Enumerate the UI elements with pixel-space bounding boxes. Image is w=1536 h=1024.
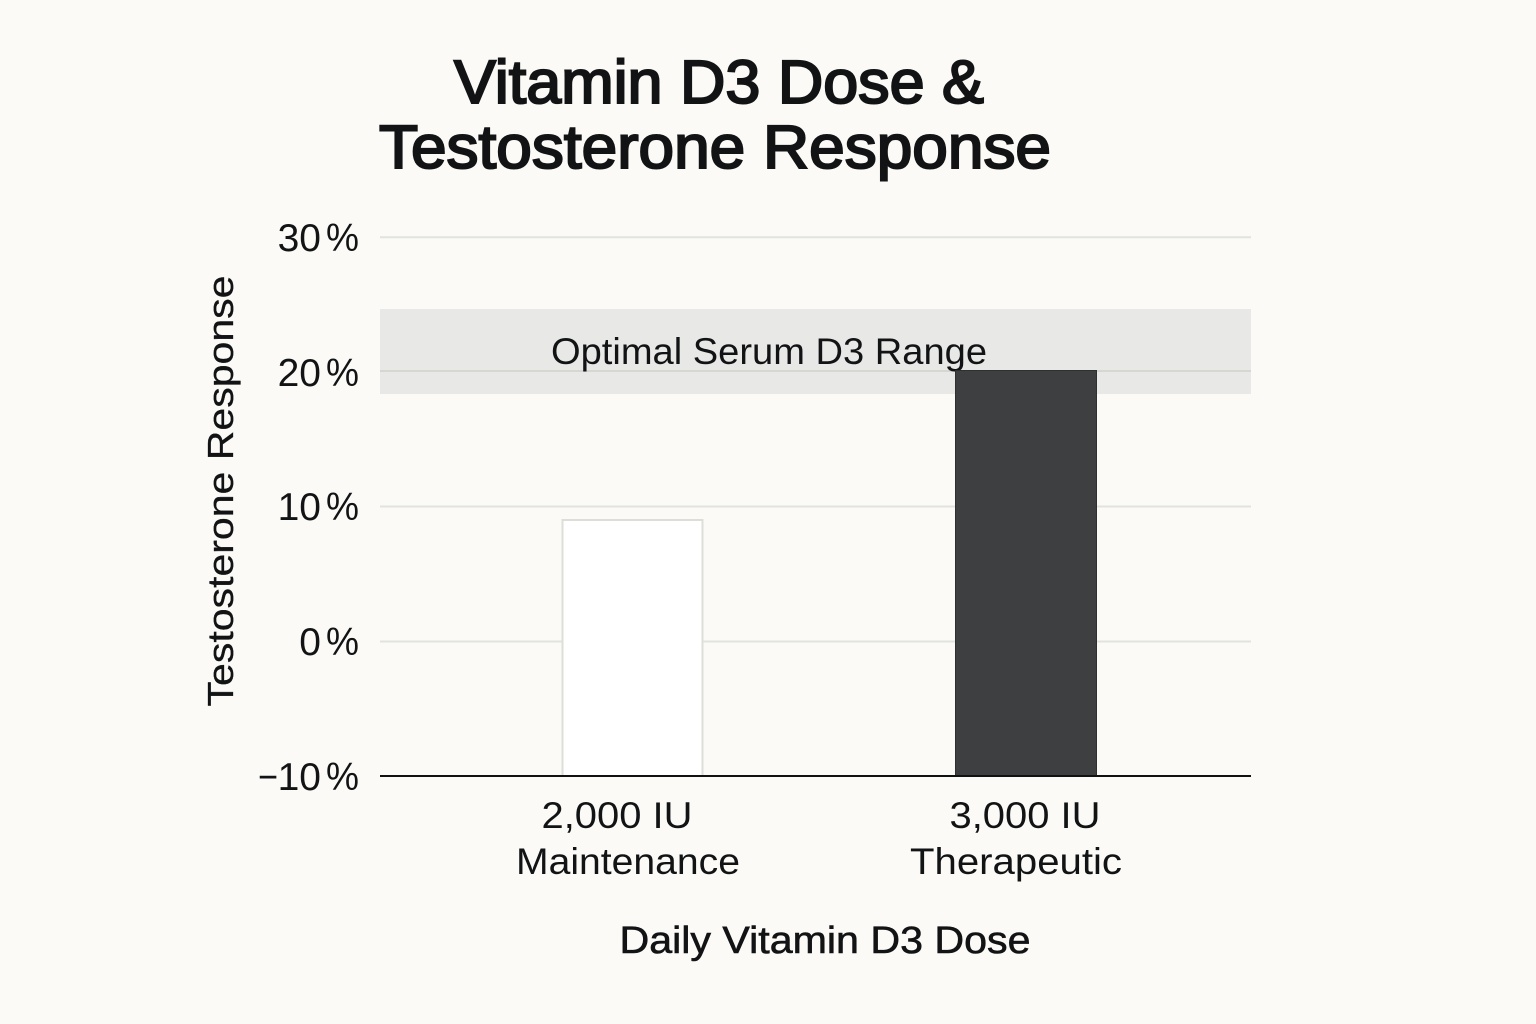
y axis tick labels: 30 [278,217,321,260]
y axis tick labels: 0 [299,621,321,664]
category label: 2,000 IU [516,795,740,882]
category label: 3,000 IU: 3,000 IU [950,795,1100,836]
y axis tick labels: − [258,756,278,799]
x axis line [380,775,1251,777]
band: optimal serum D3 range [380,309,1251,394]
y axis tick labels: 10 [278,756,321,799]
category label: 2,000 IU: Maintenance [516,841,740,882]
bar: 2,000 IU maintenance [562,520,702,776]
y axis tick labels: % [326,756,359,799]
y axis tick labels: % [326,486,359,529]
y axis tick labels: % [326,621,359,664]
y axis tick labels: 20 [278,352,321,395]
band label: Optimal Serum D3 Range [551,331,987,372]
y axis tick labels [258,217,359,799]
bar: 3,000 IU therapeutic [956,370,1096,776]
x axis title: Daily Vitamin D3 Dose [620,920,1030,962]
title: Vitamin D3 Dose & [454,48,984,116]
y axis tick labels: % [326,352,359,395]
y axis tick labels: 10 [278,486,321,529]
category label: 3,000 IU [910,795,1122,882]
title [379,48,1051,181]
title: Testosterone Response [379,113,1051,181]
category label: 2,000 IU: 2,000 IU [542,795,692,836]
category label: 3,000 IU: Therapeutic [910,841,1122,882]
y axis title: Testosterone Response [200,275,241,707]
y axis tick labels: % [326,217,359,260]
